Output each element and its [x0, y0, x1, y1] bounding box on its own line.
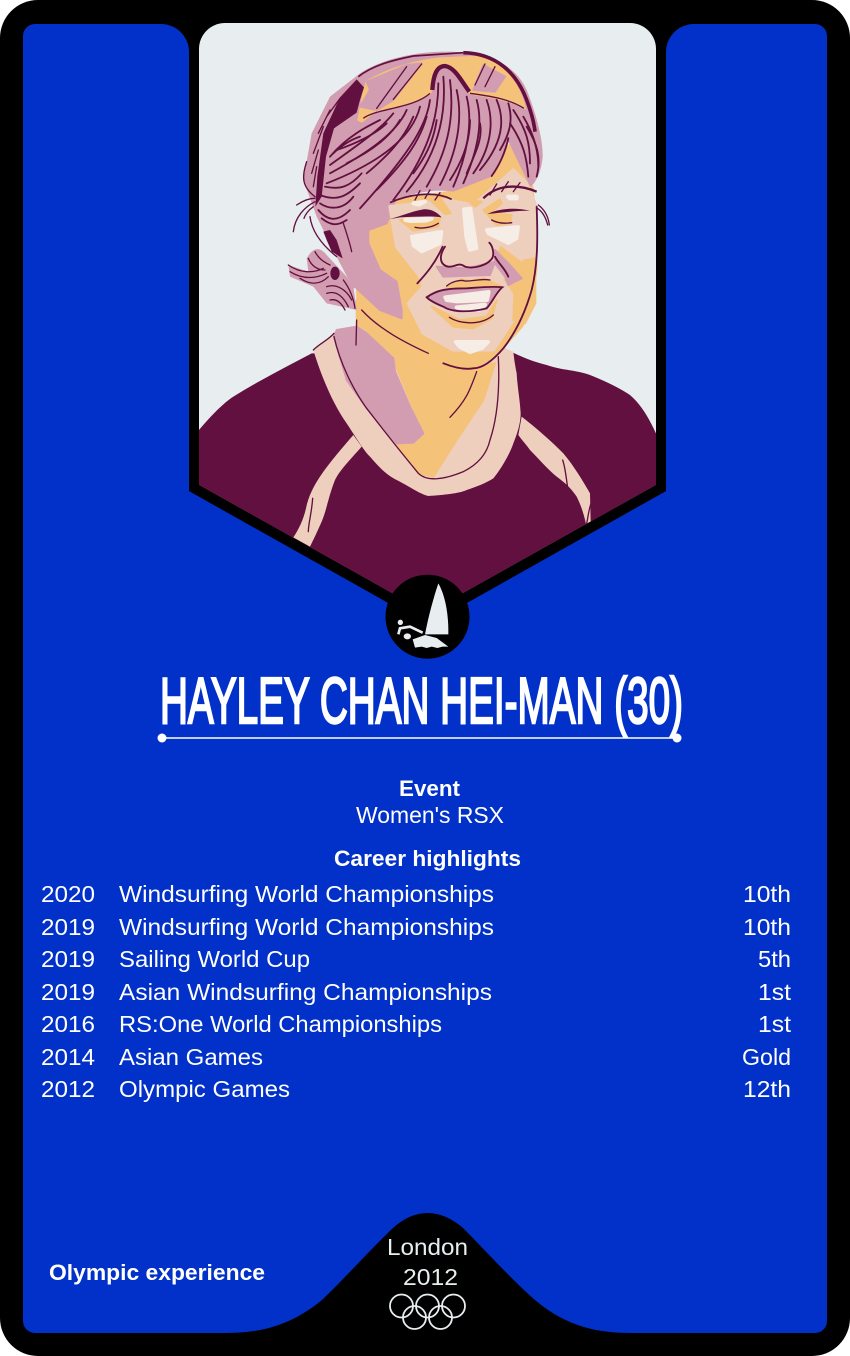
facial features: [362, 182, 537, 369]
olympic experience label: Olympic experience: [49, 1260, 265, 1285]
career highlights table: 2019: [41, 914, 95, 940]
sport badge: sailing: [386, 575, 470, 659]
host city and year: 2012: [403, 1264, 458, 1290]
career highlights table: Asian Windsurfing Championships: [119, 979, 492, 1005]
icon: windsurfer: [398, 583, 448, 648]
career highlights table: 2020: [41, 881, 95, 907]
career highlights table: 10th: [743, 914, 791, 940]
career highlights table: Windsurfing World Championships: [119, 881, 494, 907]
career highlights table: Olympic Games: [119, 1076, 290, 1102]
career highlights table: 2014: [41, 1044, 95, 1070]
career highlights table: Asian Games: [119, 1044, 263, 1070]
host city and year: London: [387, 1234, 468, 1260]
icon: olympic rings: [390, 1294, 465, 1329]
career highlights heading: Career highlights: [334, 846, 521, 871]
head and hair: [288, 52, 549, 369]
career highlights table: 10th: [743, 881, 791, 907]
career highlights table: Sailing World Cup: [119, 946, 310, 972]
career highlights table: 2019: [41, 946, 95, 972]
career highlights table: Gold: [742, 1044, 791, 1070]
career highlights table: [41, 881, 791, 1102]
career highlights table: 1st: [758, 1011, 791, 1037]
ear and ponytail: [288, 230, 357, 310]
host city and year: [387, 1234, 468, 1290]
career highlights table: 2016: [41, 1011, 95, 1037]
event value: Women's RSX: [356, 802, 504, 828]
career highlights table: RS:One World Championships: [119, 1011, 442, 1037]
career highlights table: 12th: [743, 1076, 791, 1102]
career highlights table: 5th: [758, 946, 791, 972]
career highlights table: 1st: [758, 979, 791, 1005]
athlete portrait: [199, 23, 656, 594]
event label: Event: [399, 776, 460, 801]
career highlights table: 2019: [41, 979, 95, 1005]
career highlights table: Windsurfing World Championships: [119, 914, 494, 940]
name underline: [158, 734, 682, 742]
hexagon bottom border: [189, 485, 666, 625]
hair strands: [293, 77, 549, 257]
shirt and neck: [199, 299, 656, 594]
career highlights table: 2012: [41, 1076, 95, 1102]
